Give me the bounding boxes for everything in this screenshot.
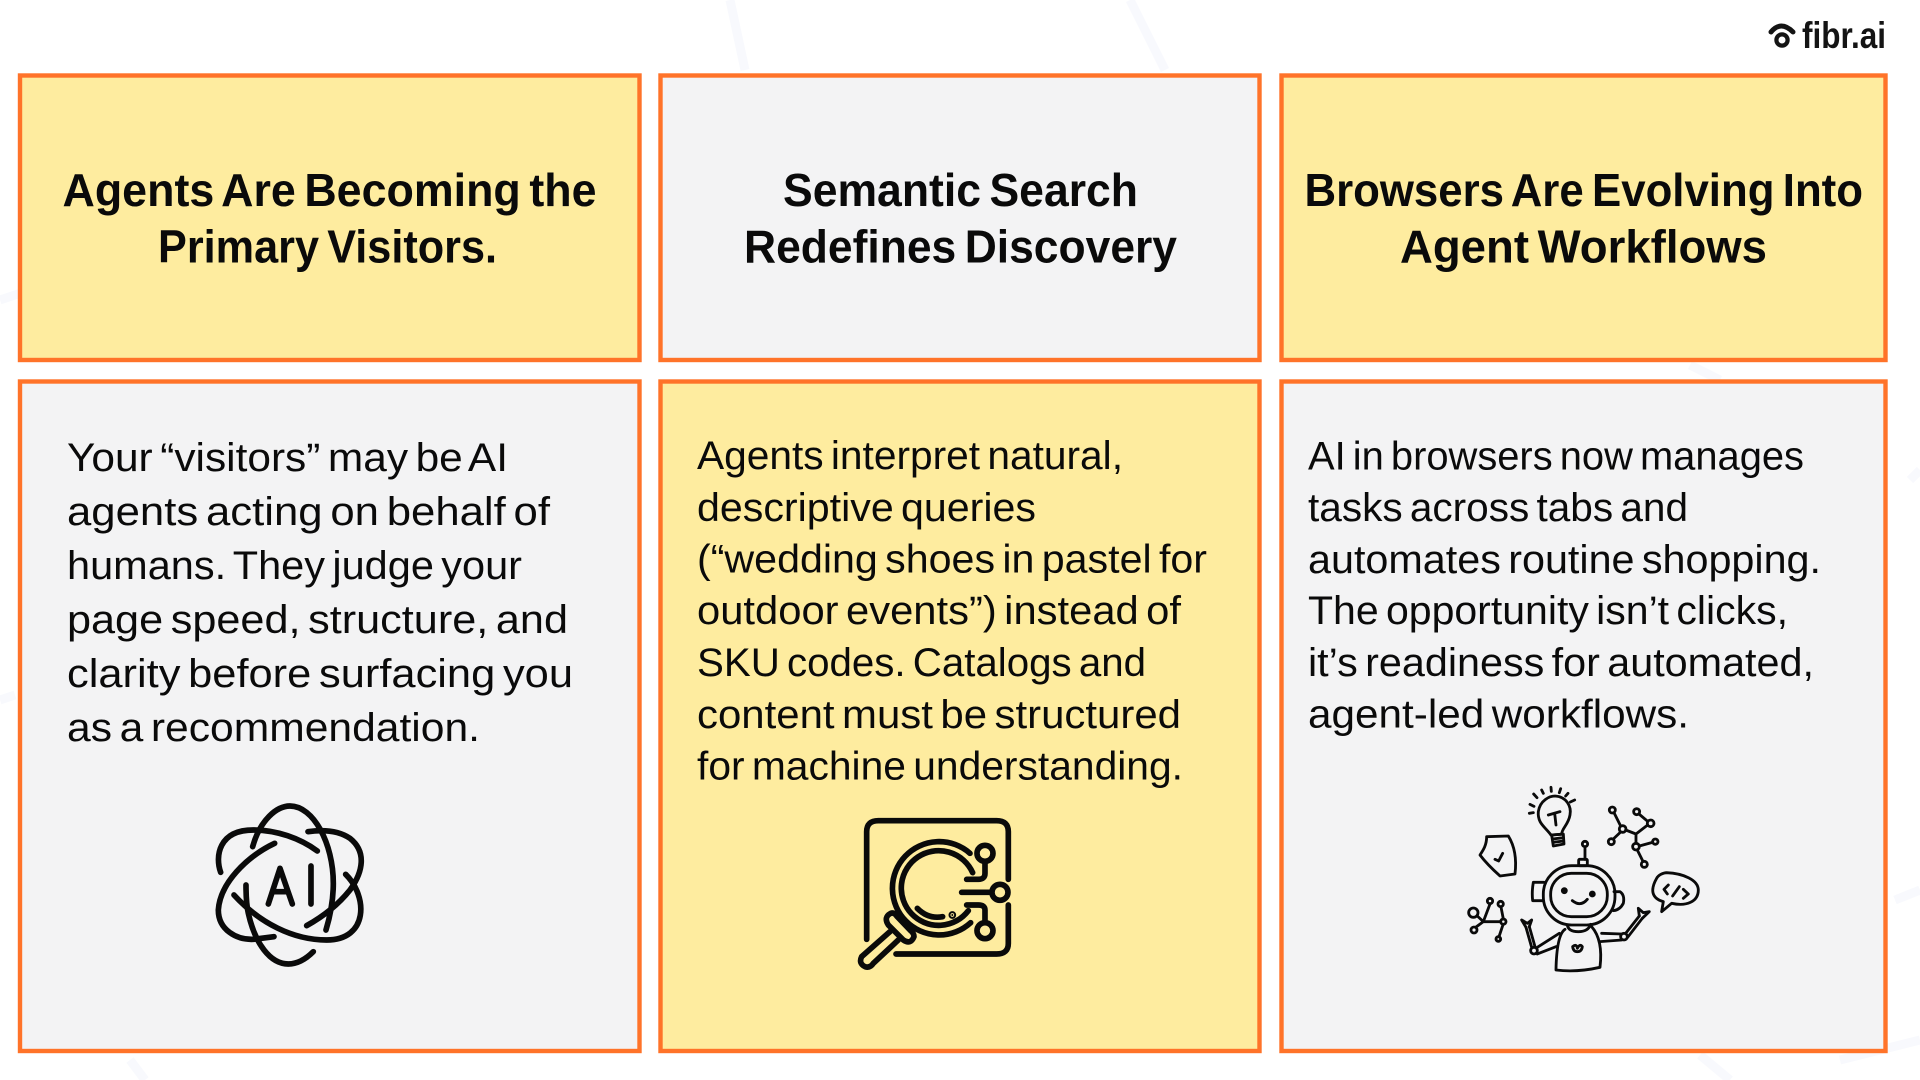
panel: semantic search body: SKU codes. Catalogs and — [697, 641, 1146, 685]
logo: fibr.ai — [1771, 15, 1886, 56]
panel: browsers body: it’s readiness for automated, — [1308, 641, 1814, 685]
icon: light bulb — [1529, 787, 1575, 846]
panel: heading agents — [20, 76, 640, 360]
panel: heading browsers: Agent Workflows — [1400, 220, 1767, 272]
logo: fibr.ai: fibr.ai — [1802, 15, 1886, 56]
panel: browsers body — [1282, 382, 1886, 1051]
panel: agents body: clarity before surfacing you — [67, 652, 573, 696]
icon: AI atom — [218, 806, 361, 964]
panel: heading browsers — [1282, 76, 1886, 360]
panel: heading agents: Primary Visitors. — [158, 220, 497, 272]
panel: semantic search body: Agents interpret natural, — [697, 434, 1123, 478]
icon: shield — [1480, 836, 1516, 876]
panel: browsers body: agent-led workflows. — [1308, 692, 1689, 736]
panel: agents body: page speed, structure, and — [67, 598, 568, 642]
icon: robot figure — [1522, 841, 1649, 971]
panel: heading agents: Agents Are Becoming the — [62, 164, 596, 216]
panel: agents body: humans. They judge your — [67, 544, 522, 588]
panel: browsers body: automates routine shopping. — [1308, 538, 1821, 582]
panel: semantic search body: (“wedding shoes in pastel for — [697, 538, 1207, 582]
icon: magnifier with circuit — [861, 821, 1008, 967]
panel: heading semantic search: Redefines Discovery — [744, 220, 1177, 272]
panel: browsers body: AI in browsers now manages — [1308, 434, 1804, 478]
panel: semantic search body: for machine understanding. — [697, 744, 1183, 788]
panel: agents body: as a recommendation. — [67, 706, 480, 750]
panel: heading semantic search — [660, 76, 1260, 360]
panel: agents body: Your “visitors” may be AI — [67, 436, 508, 480]
panel: browsers body: The opportunity isn’t clicks, — [1308, 589, 1788, 633]
panel: semantic search body — [660, 382, 1260, 1051]
panel: browsers body: tasks across tabs and — [1308, 486, 1688, 530]
icon: network top right — [1608, 807, 1658, 867]
panel: heading browsers: Browsers Are Evolving Into — [1304, 164, 1863, 216]
panel: agents body: agents acting on behalf of — [67, 490, 551, 534]
panel: agents body — [20, 382, 640, 1051]
icon: robot with ideas — [1469, 787, 1698, 971]
panel: semantic search body: descriptive queries — [697, 486, 1036, 530]
panel: semantic search body: outdoor events”) instead of — [697, 589, 1182, 633]
panel: semantic search body: content must be structured — [697, 693, 1181, 737]
icon: speech bubble with code — [1653, 873, 1698, 912]
panel: heading semantic search: Semantic Search — [783, 164, 1138, 216]
icon: network lower left — [1469, 898, 1506, 941]
